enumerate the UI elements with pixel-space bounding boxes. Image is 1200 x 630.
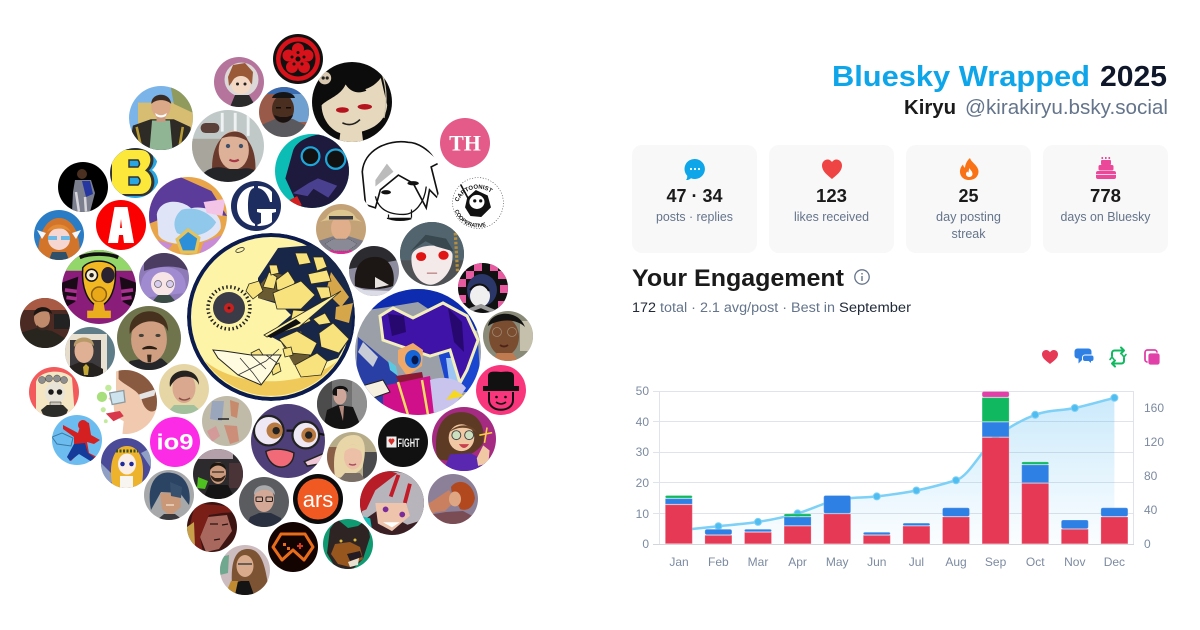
title: 2025 <box>1100 61 1167 93</box>
avatar: letter A <box>96 200 146 250</box>
avatar: man at bar <box>20 298 70 348</box>
icon: info <box>855 270 869 284</box>
panel: day posting streak: day posting <box>936 210 1001 224</box>
panel: likes received <box>769 145 894 253</box>
month labels: Aug <box>945 555 967 569</box>
avatar: blue hair man <box>144 470 194 520</box>
y axis labels: 30 <box>636 445 649 459</box>
month labels: May <box>826 555 849 569</box>
avatar: grey hair man <box>239 477 289 527</box>
avatar: blue elephant wizard <box>149 177 227 255</box>
avatar: sketch drawing <box>202 396 252 446</box>
y axis labels: 20 <box>636 476 649 490</box>
avatar: man with straw hat <box>316 204 366 254</box>
avatar: woman bottom <box>220 545 270 595</box>
avatar: figure in suit <box>58 162 108 212</box>
user name and handle: @kirakiryu.bsky.social <box>965 97 1168 119</box>
avatar: fight logo <box>378 417 428 467</box>
slash <box>264 291 341 337</box>
avatar: ars logo: ars <box>303 487 333 512</box>
avatar: io9 logo <box>150 417 200 467</box>
avatar: fight logo: FIGHT <box>398 436 420 450</box>
avatar: anime red eyes <box>400 222 464 286</box>
avatar: Guardian G <box>231 181 281 231</box>
panel: likes received: likes received <box>794 210 869 224</box>
icon: likes <box>1042 350 1058 364</box>
cumulative line <box>679 398 1114 530</box>
dark cracked area <box>258 245 354 368</box>
secondary axis labels <box>1144 401 1164 551</box>
y axis labels <box>636 384 649 551</box>
month labels <box>669 555 1125 569</box>
panel: day posting streak: 25 <box>958 185 978 206</box>
cumulative area <box>679 398 1114 544</box>
engagement chart <box>636 384 1164 569</box>
avatar: ars logo <box>293 474 343 524</box>
avatar: smiling man curly hair <box>159 364 209 414</box>
avatar cluster <box>20 34 533 595</box>
avatar: cartoonist cooperative <box>452 177 504 229</box>
icon: heart <box>822 160 842 179</box>
y axis labels: 40 <box>636 415 649 429</box>
rocks <box>246 253 349 377</box>
avatar: line art white hair <box>359 139 441 223</box>
avatar: vader with sunglasses <box>275 133 349 208</box>
avatar: pink hat icon <box>476 365 526 415</box>
icon: cake <box>1096 157 1116 179</box>
avatar: purple monster glasses <box>251 404 325 478</box>
panel: days on Bluesky: days on Bluesky <box>1060 210 1151 224</box>
avatar: orange hair anime girl <box>34 210 84 260</box>
title: Bluesky Wrapped <box>832 61 1090 93</box>
avatar: woman with glasses <box>483 311 533 361</box>
icon: replies <box>1074 348 1094 364</box>
avatar: dark red hair <box>187 502 237 552</box>
avatar: dog <box>323 519 373 569</box>
avatar: spider-man <box>52 415 102 465</box>
month labels: Oct <box>1026 555 1045 569</box>
avatar: man with beard <box>259 87 309 137</box>
month labels: Jul <box>909 555 924 569</box>
panel: days on Bluesky <box>1043 145 1168 253</box>
engagement summary: September <box>839 300 912 315</box>
y axis labels: 0 <box>642 537 649 551</box>
avatar: goth cartoon girl <box>312 62 392 142</box>
avatar: gas mask <box>62 250 136 324</box>
icon: reposts <box>1110 348 1126 366</box>
month labels: Jan <box>669 555 689 569</box>
user name and handle: Kiryu <box>904 97 956 119</box>
eye <box>208 287 250 329</box>
month labels: Mar <box>748 555 768 569</box>
avatar: TH logo: TH <box>449 130 481 156</box>
avatar: black cat <box>349 246 399 296</box>
secondary axis labels: 40 <box>1144 503 1158 517</box>
teeth <box>213 350 281 385</box>
icon: flame <box>960 158 978 180</box>
y axis labels: 50 <box>636 384 649 398</box>
avatar: redhead painting <box>428 474 478 524</box>
avatar: purple cartoon woman <box>432 407 496 471</box>
month labels: Apr <box>788 555 807 569</box>
panel: posts and replies <box>632 145 757 253</box>
avatar: TH logo <box>440 118 490 168</box>
avatar: large purple jester <box>355 289 481 415</box>
y axis labels: 10 <box>636 507 649 521</box>
month labels: Nov <box>1064 555 1085 569</box>
month labels: Jun <box>867 555 886 569</box>
avatar: pink checker <box>458 263 508 313</box>
avatar: purple hair anime <box>139 253 189 303</box>
avatar: blonde woman <box>327 432 377 482</box>
panel: day posting streak <box>906 145 1031 253</box>
chart legend icons <box>1042 348 1160 366</box>
month labels: Sep <box>985 555 1007 569</box>
avatar: man in patterned shirt <box>129 86 193 150</box>
secondary axis labels: 120 <box>1144 435 1164 449</box>
secondary axis labels: 160 <box>1144 401 1164 415</box>
panel: day posting streak: streak <box>952 227 986 241</box>
avatar: woman selfie <box>192 110 264 182</box>
avatar: man in black shirt <box>317 379 367 429</box>
avatar: skull with flower crown <box>29 367 79 417</box>
avatar: io9 logo: io9 <box>156 430 194 454</box>
icon: chat bubble <box>685 159 705 180</box>
avatar: red white hair anime <box>360 471 424 535</box>
secondary axis labels: 80 <box>1144 469 1158 483</box>
heading: your engagement: Your Engagement <box>632 265 844 292</box>
month labels: Feb <box>708 555 729 569</box>
avatar: cartoonist cooperative: CARTOONIST <box>455 184 493 202</box>
panel: posts and replies: posts · replies <box>656 210 733 224</box>
engagement summary: total · 2.1 avg/post · Best in <box>660 300 835 315</box>
engagement summary <box>632 300 912 315</box>
avatar: blond man in doorway <box>65 327 115 377</box>
line points <box>675 394 1118 534</box>
avatar: gamepad logo <box>268 522 318 572</box>
icon: quotes <box>1145 350 1160 365</box>
avatar: red flower <box>273 34 323 84</box>
engagement summary: 172 <box>632 300 656 315</box>
avatar: large moon face <box>187 233 355 401</box>
month labels: Dec <box>1104 555 1125 569</box>
avatar: caricature with glasses <box>93 369 157 434</box>
avatar: bearded man green screen <box>193 449 243 499</box>
avatar: letter B <box>110 148 160 198</box>
secondary axis labels: 0 <box>1144 537 1151 551</box>
panel: likes received: 123 <box>816 185 847 206</box>
avatar: cartoonist cooperative: COOPERATIVE <box>455 210 486 228</box>
avatar: sailor anime <box>101 438 151 488</box>
avatar: cartoon brown hair <box>214 57 264 107</box>
panel: days on Bluesky: 778 <box>1090 185 1121 206</box>
avatar: goatee man <box>117 306 181 370</box>
stacked bars <box>665 392 1128 544</box>
panel: posts and replies: 47 · 34 <box>666 185 723 206</box>
